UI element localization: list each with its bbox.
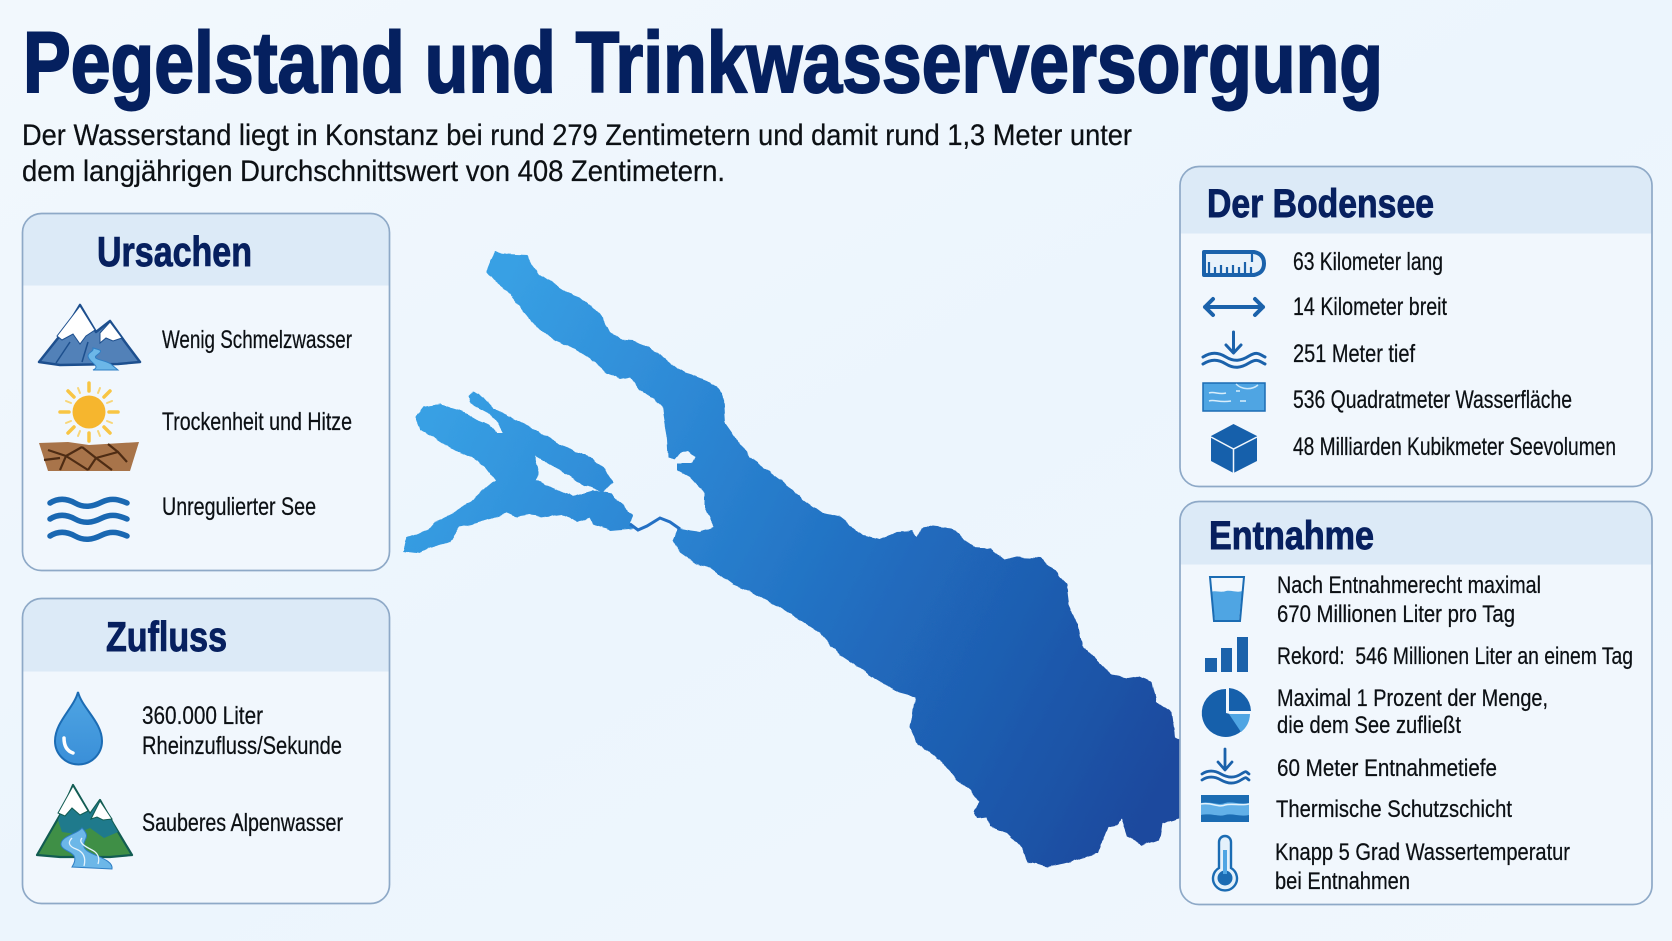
icon: depth arrow over waves bbox=[1203, 332, 1265, 367]
text: extraction depth: 60 Meter Entnahmetiefe bbox=[1277, 755, 1497, 782]
icon: thermometer bbox=[1213, 836, 1237, 890]
text: temperature: Knapp 5 Grad Wassertemperatur bbox=[1275, 839, 1570, 866]
text: Sauberes Alpenwasser: Sauberes Alpenwasser bbox=[142, 809, 343, 837]
text: Trockenheit und Hitze: Trockenheit und Hitze bbox=[162, 408, 352, 436]
icon: water surface bbox=[1203, 383, 1265, 411]
intro text: dem langjährigen Durchschnittswert von 408 Zentimetern. bbox=[22, 155, 725, 188]
text: Wenig Schmelzwasser: Wenig Schmelzwasser bbox=[162, 326, 352, 354]
icon: thermal layer bbox=[1201, 795, 1249, 822]
intro text: Der Wasserstand liegt in Konstanz bei rund 279 Zentimetern und damit rund 1,3 Meter unter bbox=[22, 119, 1132, 152]
text: Rheinzufluss: Rheinzufluss/Sekunde bbox=[142, 732, 342, 760]
icon: green alpine valley with river bbox=[37, 785, 132, 869]
icon: water glass bbox=[1210, 577, 1244, 621]
panel: Ursachen bbox=[22, 214, 390, 570]
icon: ruler bbox=[1204, 252, 1264, 275]
icon: bar chart bbox=[1205, 637, 1248, 672]
text: temperature bbox=[1275, 839, 1570, 895]
text: thermal layer: Thermische Schutzschicht bbox=[1276, 796, 1512, 823]
icon: width arrow bbox=[1205, 299, 1263, 315]
text: extraction right: 670 Millionen Liter pro Tag bbox=[1277, 601, 1515, 628]
heading: Entnahme: Entnahme bbox=[1209, 514, 1374, 558]
text: one percent: die dem See zufließt bbox=[1277, 712, 1461, 739]
text: width: 14 Kilometer breit bbox=[1293, 293, 1447, 321]
panel: Zufluss bbox=[22, 598, 390, 904]
text: one percent: Maximal 1 Prozent der Menge, bbox=[1277, 685, 1548, 712]
panel: Entnahme bbox=[1180, 502, 1652, 904]
icon: sun over cracked earth bbox=[39, 383, 139, 471]
icon: water drop bbox=[55, 692, 102, 764]
map: Bodensee lake silhouette bbox=[403, 252, 1185, 867]
icon: pie chart bbox=[1202, 688, 1251, 737]
heading: Der Bodensee: Der Bodensee bbox=[1207, 182, 1434, 226]
text: Rheinzufluss bbox=[142, 702, 342, 760]
icon: waves bbox=[50, 499, 127, 539]
icon: extraction depth bbox=[1202, 749, 1249, 783]
text: extraction right bbox=[1277, 572, 1541, 628]
text: depth: 251 Meter tief bbox=[1293, 340, 1415, 368]
text: area: 536 Quadratmeter Wasserfläche bbox=[1293, 386, 1572, 414]
heading: Zufluss: Zufluss bbox=[106, 613, 227, 660]
text: Unregulierter See: Unregulierter See bbox=[162, 493, 316, 521]
title: Pegelstand und Trinkwasserversorgung bbox=[23, 15, 1383, 111]
icon: cube bbox=[1211, 424, 1257, 473]
text: length: 63 Kilometer lang bbox=[1293, 248, 1443, 276]
map: Rhine connection bbox=[630, 518, 680, 530]
text: Rheinzufluss: 360.000 Liter bbox=[142, 702, 263, 730]
icon: snowy mountains with stream bbox=[39, 305, 140, 370]
text: temperature: bei Entnahmen bbox=[1275, 868, 1410, 895]
heading: Ursachen: Ursachen bbox=[97, 228, 252, 275]
text: extraction right: Nach Entnahmerecht maximal bbox=[1277, 572, 1541, 599]
intro text bbox=[22, 119, 1132, 188]
text: one percent bbox=[1277, 685, 1548, 739]
panel: Der Bodensee bbox=[1180, 166, 1652, 486]
